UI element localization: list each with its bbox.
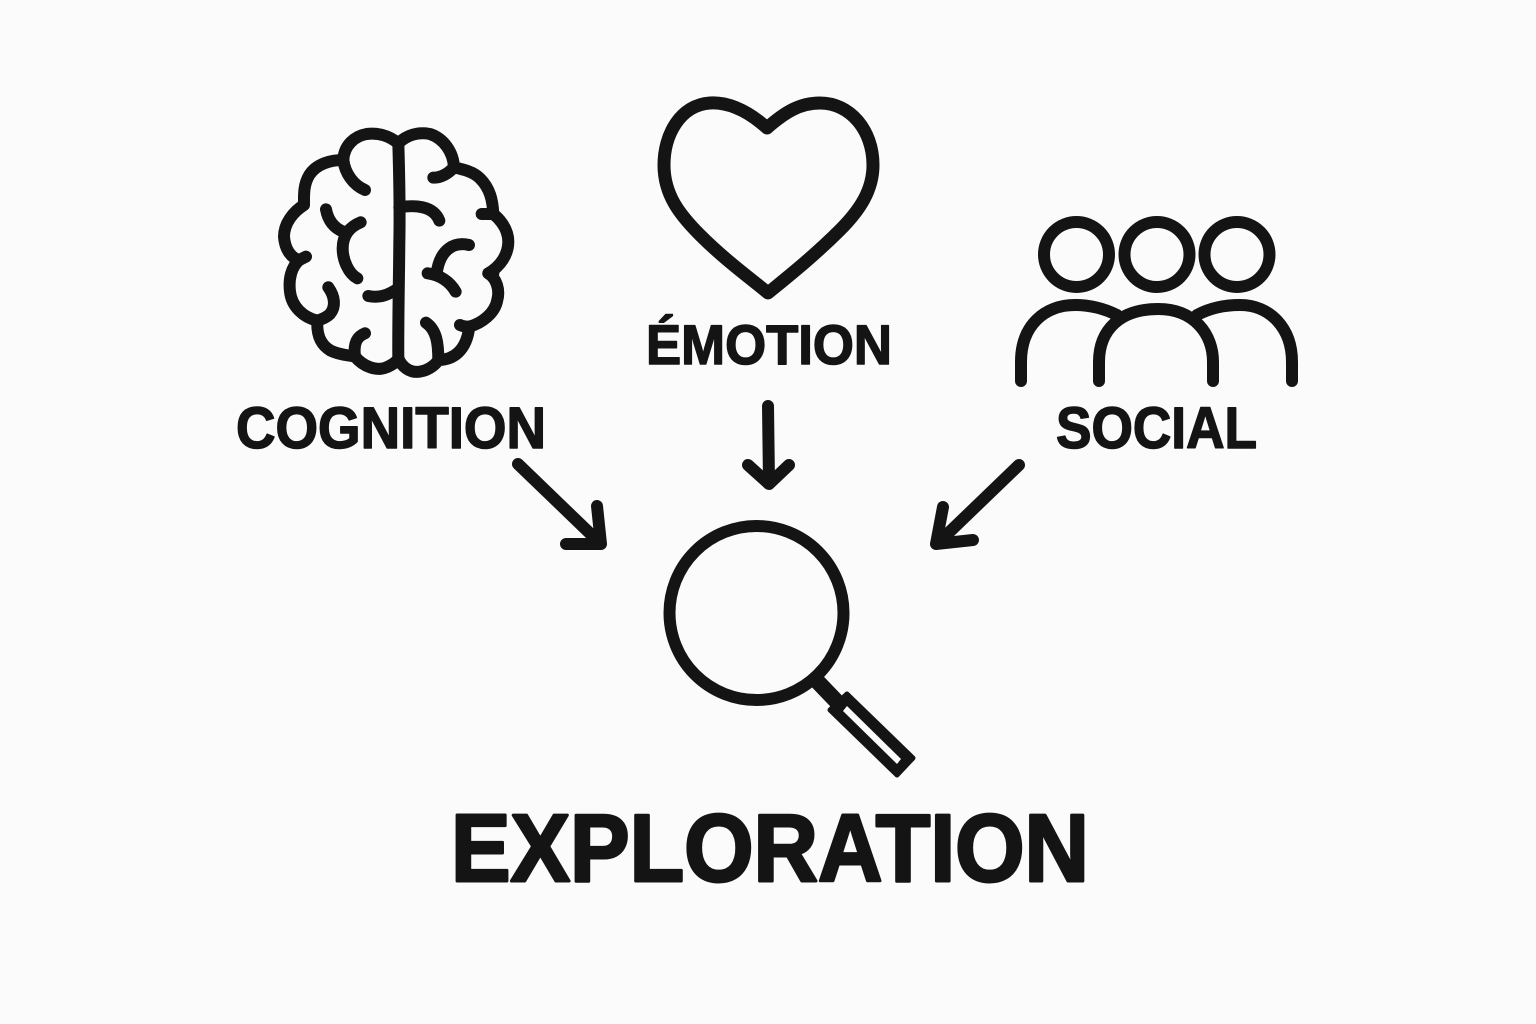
label: cognition: COGNITION bbox=[236, 396, 546, 461]
icon: group of people bbox=[1021, 222, 1292, 381]
icon: magnifying glass bbox=[670, 526, 913, 775]
icon: heart bbox=[664, 103, 873, 293]
arrow: emotion to exploration bbox=[748, 406, 789, 484]
arrow: social to exploration bbox=[936, 465, 1019, 544]
label: social: SOCIAL bbox=[1056, 396, 1257, 461]
icon: brain bbox=[284, 133, 508, 372]
label: emotion: ÉMOTION bbox=[646, 313, 892, 376]
arrow: cognition to exploration bbox=[518, 464, 601, 544]
title: exploration: EXPLORATION bbox=[451, 795, 1089, 902]
